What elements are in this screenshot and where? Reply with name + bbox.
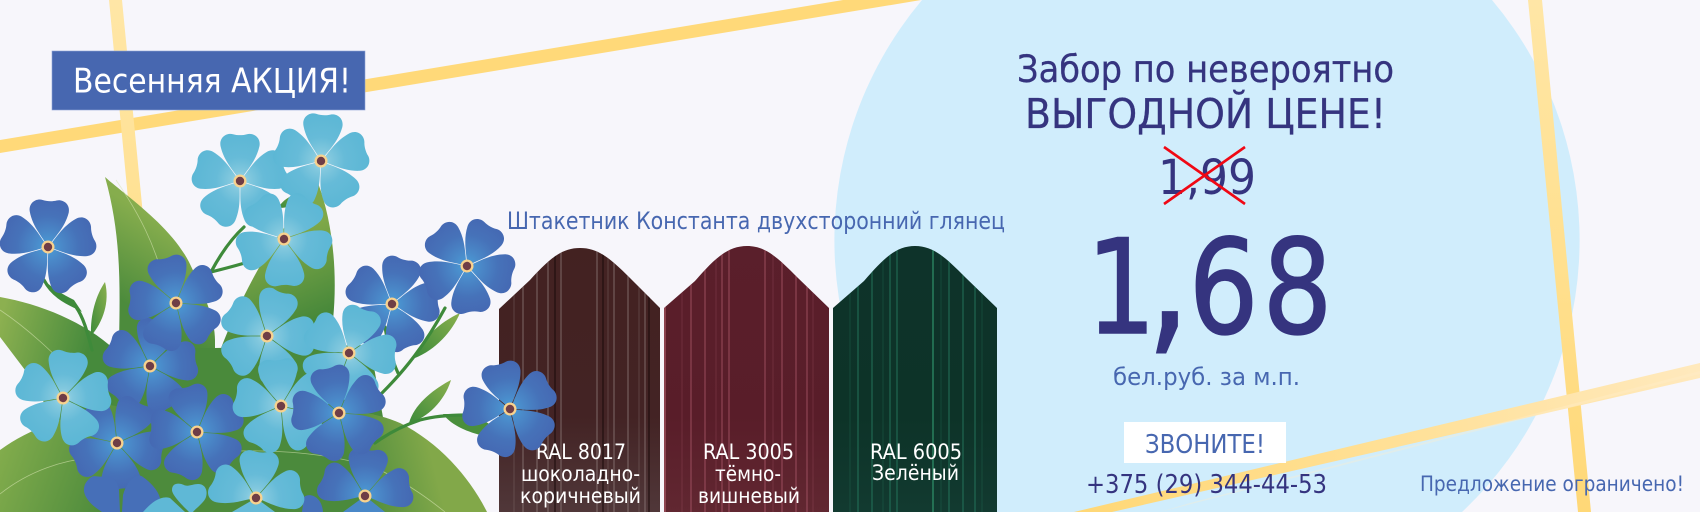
- fence panel: RAL 8017: [499, 240, 660, 512]
- promo banner: [52, 51, 365, 110]
- call button: ЗВОНИТЕ!: [1145, 430, 1265, 460]
- yellow line: right vertical: [1528, 0, 1591, 512]
- phone number: +375 (29) 344-44-53: [1086, 470, 1327, 500]
- new price: 6: [1189, 212, 1259, 364]
- yellow line: top left diagonal: [0, 0, 921, 153]
- small leaves and stems: [44, 191, 492, 443]
- yellow line: lower right diagonal: [1074, 363, 1700, 512]
- new price: 8: [1263, 212, 1333, 364]
- promo banner: Весенняя АКЦИЯ!: [73, 62, 351, 102]
- old price crossed out: 1,99: [1158, 150, 1256, 206]
- product subtitle: Штакетник Константа двухсторонний глянец: [507, 207, 1005, 235]
- fence panel: RAL 8017: шоколадно-: [521, 462, 640, 486]
- fence panel: RAL 3005: вишневый: [698, 484, 800, 508]
- fence panel: RAL 6005: RAL 6005: [870, 440, 962, 464]
- headline: ВЫГОДНОЙ ЦЕНЕ!: [1025, 90, 1386, 138]
- new price: ,: [1146, 176, 1191, 374]
- flower cluster: [0, 111, 571, 512]
- call button: [1124, 422, 1286, 463]
- fence panel: RAL 3005: тёмно-: [715, 462, 781, 486]
- fence panel: RAL 3005: RAL 3005: [703, 440, 794, 464]
- fence panel: RAL 6005: [833, 240, 997, 512]
- fence panel: RAL 6005: Зелёный: [872, 461, 959, 485]
- leaves: [0, 177, 487, 512]
- yellow line: left vertical: [109, 0, 172, 512]
- headline: [1017, 48, 1394, 138]
- light blue circle: [834, 0, 1580, 512]
- new price: 1: [1086, 212, 1156, 364]
- price unit: бел.руб. за м.п.: [1113, 363, 1300, 391]
- bouquet: [0, 111, 571, 512]
- fence panel: RAL 8017: коричневый: [520, 484, 641, 508]
- headline: Забор по невероятно: [1017, 48, 1394, 91]
- fence panel: RAL 8017: RAL 8017: [536, 440, 626, 464]
- fence panel: RAL 3005: [664, 240, 829, 512]
